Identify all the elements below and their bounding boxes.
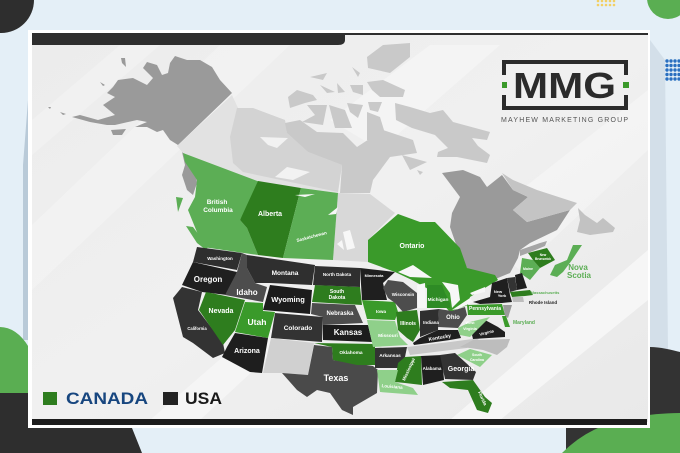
state and province labels: Louisiana (381, 383, 403, 390)
wyoming (263, 285, 312, 314)
ontario (368, 214, 498, 312)
british columbia (176, 153, 260, 255)
state and province labels: Texas (324, 373, 348, 383)
pennsylvania (467, 304, 505, 315)
saskatchewan (283, 188, 338, 260)
state and province labels: Georgia (448, 366, 474, 373)
mississippi (395, 356, 422, 385)
north dakota (313, 266, 360, 287)
arizona (222, 333, 268, 373)
missouri (367, 320, 408, 347)
kansas (323, 325, 372, 342)
state and province labels: Utah (248, 317, 266, 327)
legend (43, 389, 222, 408)
vermont and new hampshire (507, 277, 517, 292)
state and province labels: Arizona (234, 348, 260, 355)
indiana (420, 309, 439, 337)
state and province labels: Wyoming (271, 295, 305, 304)
idaho (225, 253, 267, 302)
state and province labels: Nevada (209, 308, 234, 315)
state and province labels: Saskatchewan (296, 230, 327, 243)
state and province labels: Brunswick (535, 257, 551, 261)
michigan (427, 285, 450, 308)
state and province labels: Kansas (334, 328, 363, 337)
maryland (502, 316, 510, 327)
state and province labels: Alberta (258, 211, 282, 218)
state and province labels: Massachusetts (531, 290, 560, 295)
illinois (396, 310, 420, 342)
state and province labels: Maine (523, 267, 533, 271)
state and province labels: Washington (207, 256, 233, 261)
manitoba (333, 193, 395, 262)
oklahoma (314, 343, 375, 365)
state and province labels: Illinois (400, 321, 416, 327)
state and province labels: Alabama (423, 366, 442, 371)
dot grid: yellow (597, 0, 615, 6)
state and province labels: Pennsylvania (469, 306, 501, 312)
state and province labels: Wisconsin (392, 292, 414, 297)
logo: mayhew marketing group: MMG (513, 65, 616, 106)
state and province labels: West (465, 321, 475, 325)
state and province labels: Ohio (446, 315, 460, 321)
state and province labels: Oregon (194, 275, 222, 284)
state and province labels: Carolina (470, 358, 484, 362)
texas (282, 345, 378, 415)
quebec and atlantic (442, 170, 615, 280)
arkansas (375, 347, 407, 368)
nevada (199, 292, 245, 345)
wisconsin (383, 280, 417, 312)
new mexico (263, 338, 314, 375)
map: canada and alaska (48, 43, 615, 312)
alberta (240, 181, 301, 258)
georgia (440, 353, 476, 380)
state and province labels: South (472, 353, 482, 357)
state and province labels: Kentucky (428, 333, 452, 343)
state and province labels: Florida (477, 391, 488, 407)
state and province labels: Iowa (376, 309, 386, 314)
nunavut and arctic islands (285, 43, 490, 193)
state and province labels: British (207, 199, 227, 206)
state and province labels: Colorado (284, 325, 312, 332)
california (173, 287, 225, 358)
state and province labels: Nova (568, 263, 588, 272)
state and province labels: Idaho (236, 288, 258, 297)
state and province labels: South (330, 289, 344, 295)
ohio (438, 307, 467, 328)
florida (442, 380, 492, 413)
state and province labels: Michigan (428, 297, 448, 303)
legend label: canada: CANADA (66, 389, 148, 408)
montana (247, 255, 315, 285)
state and province labels: Arkansas (379, 353, 401, 359)
map: usa states (173, 247, 533, 415)
state and province labels: Indiana (423, 320, 439, 325)
iowa (362, 300, 398, 320)
new brunswick, maine and nova scotia (520, 245, 582, 280)
maine (515, 273, 527, 290)
state and province labels: Nebraska (326, 311, 354, 317)
legend swatch: usa (163, 392, 178, 405)
state and province labels: Minnesota (365, 274, 384, 278)
state and province labels: Montana (272, 270, 299, 277)
utah (235, 302, 275, 338)
state and province labels: North Dakota (323, 272, 352, 277)
kentucky (413, 330, 461, 345)
state and province labels: Virginia (479, 328, 495, 337)
dot grid: blue (665, 59, 680, 81)
state and province labels: York (498, 293, 507, 298)
state and province labels: Rhode Island (529, 300, 557, 305)
new york (473, 278, 512, 304)
washington (193, 247, 242, 270)
colorado (271, 313, 323, 342)
state and province labels: Virginia (463, 327, 478, 331)
massachusetts (510, 290, 533, 297)
state and province labels: Dakota (329, 295, 346, 301)
state and province labels: Columbia (203, 207, 233, 214)
state and province labels: Oklahoma (339, 350, 363, 356)
virginia (472, 320, 505, 339)
oregon (182, 262, 237, 295)
south dakota (312, 285, 362, 305)
state and province labels: Scotia (567, 271, 592, 280)
state and province labels: Maryland (513, 320, 535, 326)
legend swatch: canada (43, 392, 57, 405)
south carolina (457, 349, 492, 367)
logo: mayhew marketing group (501, 60, 629, 124)
alaska (48, 56, 232, 195)
north carolina (460, 339, 510, 355)
yukon and northwest territories (177, 95, 342, 193)
small lakes (295, 194, 338, 215)
state and province labels: New (540, 253, 547, 257)
state and province labels: Mississippi (401, 357, 416, 381)
tennessee (407, 338, 480, 355)
state and province labels (187, 199, 592, 407)
west virginia (458, 317, 490, 337)
state and province labels: California (187, 326, 207, 331)
legend label: usa: USA (185, 389, 222, 408)
great lakes (398, 265, 485, 310)
alabama (421, 355, 444, 385)
new jersey (503, 305, 512, 318)
minnesota (360, 268, 395, 300)
state and province labels: New (494, 289, 503, 294)
louisiana (377, 370, 418, 395)
connecticut (512, 297, 524, 302)
logo: mayhew marketing group: MAYHEW MARKETING GROUP (501, 117, 628, 124)
state and province labels: Ontario (400, 243, 424, 250)
nebraska (311, 303, 363, 325)
state and province labels: Missouri (378, 333, 398, 339)
